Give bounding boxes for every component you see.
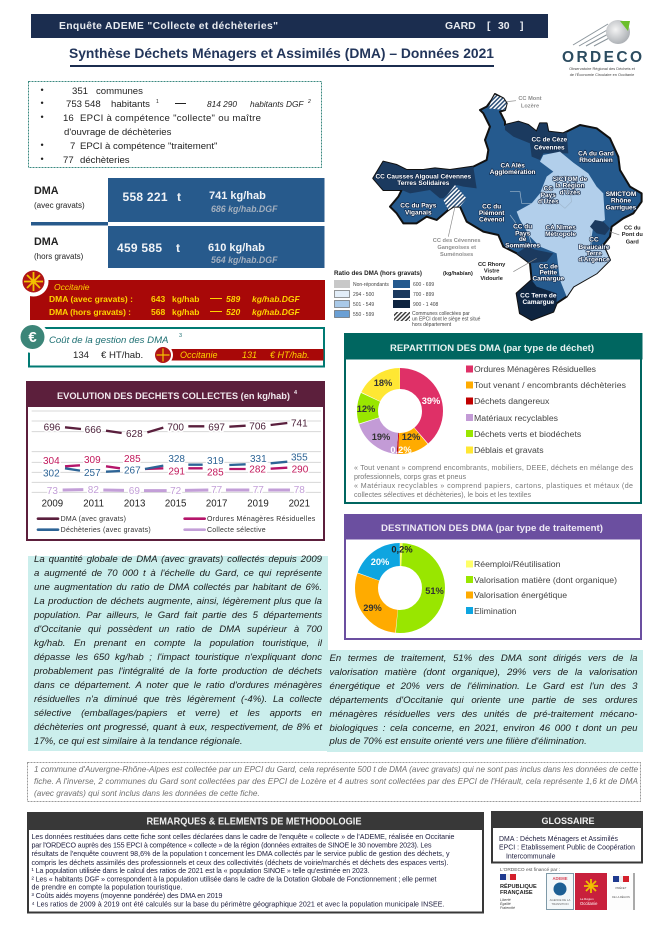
- panel: management cost: € HT/hab.: [101, 350, 143, 361]
- map of EPCI ratios: Vistre: [484, 269, 499, 275]
- key figures box: 77: [63, 155, 74, 166]
- donut chart: waste types: [357, 378, 441, 455]
- text block: treatment analysis: énergétique et 20% vers de l'élimination. Le Gard est l'un des 3: [330, 681, 638, 692]
- text block: collection analysis: d'Occitanie qui possèdent un ratio de DMA supérieur à 700: [34, 624, 322, 635]
- note: definitions: [354, 464, 633, 499]
- panel: Occitanie comparison: kg/hab.DGF: [252, 307, 301, 317]
- logo: République française: FRANÇAISE: [500, 890, 533, 896]
- map of EPCI ratios: CC du: [624, 225, 641, 231]
- map of EPCI ratios: Agglomération: [490, 169, 536, 176]
- panel: glossary: [491, 811, 643, 862]
- chart legend: Déchèteries (avec gravats): [61, 527, 151, 534]
- map of EPCI ratios: Beaucaire: [578, 244, 610, 251]
- map of EPCI ratios: Gangeoises et: [437, 245, 476, 251]
- note: cross-boundary communes: (avec gravats) qui sont inclus dans les données de cette fiche.: [34, 789, 260, 798]
- remarks text: de prendre en compte la population touristique.: [32, 884, 183, 892]
- donut chart: waste types: 12%: [402, 432, 421, 442]
- text block: treatment analysis: En termes de traitement, 51% des DMA sont dirigés vers de la: [330, 653, 638, 664]
- line chart: 77: [211, 485, 223, 496]
- remarks text: par l'ORDECO auprès des 155 EPCI à compétence « collecte » de la région (données extraites de SINOE le 30 novembre 2023). Les: [32, 842, 432, 850]
- note: definitions: collectes sélectives et déchèteries), le bois et les textiles: [354, 491, 531, 499]
- map of EPCI ratios: [373, 94, 643, 320]
- text block: treatment analysis: plus de 70% est ensuite orienté vers une filière d'élimination.: [330, 736, 587, 747]
- logo: Région Occitanie: La Région: [580, 897, 594, 901]
- text block: collection analysis: La quantité globale de DMA (avec gravats) collectés depuis 2009: [34, 554, 322, 565]
- DMA with rubble figures: 558 221: [122, 190, 168, 204]
- heading: evolution: 4: [294, 390, 298, 396]
- legend: waste types: Déblais et gravats: [474, 445, 544, 455]
- text block: treatment analysis: [327, 650, 643, 752]
- key figures box: •: [40, 98, 44, 108]
- panel: evolution of collected waste: [26, 381, 325, 540]
- chart legend: [37, 516, 316, 534]
- header bar: [: [487, 21, 491, 32]
- map of EPCI ratios: CC Rhony: [478, 262, 506, 268]
- logo: ORDECO: Observatoire Régional des Déchets et: [569, 66, 636, 71]
- panel: management cost: € HT/hab.: [270, 350, 310, 360]
- line chart: 355: [291, 452, 308, 463]
- map of EPCI ratios: Piémont: [479, 210, 505, 217]
- map of EPCI ratios: CA Alès: [500, 162, 525, 169]
- DMA without rubble figures: DMA: [34, 236, 59, 248]
- chart legend: DMA (avec gravats): [61, 516, 126, 523]
- map of EPCI ratios: la Région: [555, 183, 585, 190]
- text block: collection analysis: population. Par ailleurs, le Gard fait partie des 5 départements: [34, 610, 322, 621]
- glossary text: DMA : Déchets Ménagers et Assimilés: [499, 836, 619, 843]
- panel: management cost: €: [28, 329, 37, 346]
- text block: treatment analysis: valorisation matière (dont organique), 29% vers de la valorisation: [330, 667, 638, 678]
- line chart: 696: [44, 422, 61, 433]
- map of EPCI ratios: CC de: [539, 263, 558, 270]
- map of EPCI ratios: d'Uzès: [538, 198, 559, 205]
- map of EPCI ratios: Cévennes: [534, 144, 565, 151]
- remarks text: ¹ La population utilisée dans le calcul des ratios de 2021 est la « population SINOE » telle qu'estimée en 2023.: [32, 867, 370, 875]
- heading: destination: DESTINATION DES DMA (par type de traitement): [381, 523, 603, 533]
- key figures box: 2: [307, 99, 311, 105]
- logo: République française: Liberté: [500, 898, 511, 902]
- line chart: 290: [292, 464, 309, 475]
- key figures box: communes: [96, 86, 143, 97]
- text block: collection analysis: 17%, ce qui est similaire à la tendance régionale.: [34, 736, 243, 747]
- map of EPCI ratios: Sommières: [505, 242, 541, 249]
- panel: management cost: Occitanie: [180, 350, 218, 360]
- map of EPCI ratios: d'Uzès: [560, 189, 581, 196]
- legend: waste types: Déchets verts et biodéchets: [474, 429, 582, 439]
- map legend: 294 - 500: [353, 292, 374, 298]
- map of EPCI ratios: Viganais: [405, 209, 432, 216]
- logo: Préfet: PRÉFET: [615, 885, 627, 890]
- map of EPCI ratios: CC: [544, 186, 553, 193]
- map of EPCI ratios: CC Mont: [518, 96, 542, 102]
- map of EPCI ratios: CC Causses Aigoual Cévennes: [376, 173, 472, 180]
- text block: collection analysis: kg/hab. En prenant en compte la population touristique, il: [34, 638, 322, 649]
- line chart: 331: [250, 454, 267, 465]
- logo: ORDECO: ORDECO: [562, 49, 642, 66]
- map of EPCI ratios: Pont du: [622, 232, 643, 238]
- glossary text: [499, 836, 635, 860]
- heading: evolution: EVOLUTION DES DECHETS COLLECTES (en kg/hab): [57, 391, 290, 402]
- line chart: 328: [168, 454, 185, 465]
- funders logos: L'ORDECO est financé par :: [500, 867, 560, 873]
- legend: treatment: Valorisation matière (dont organique): [474, 575, 617, 585]
- text block: treatment analysis: ménagères résiduelles vers des unités de pré-traitement mécano-: [330, 709, 638, 720]
- key figures box: •: [40, 112, 44, 122]
- line chart: 2013: [124, 499, 145, 510]
- panel: Occitanie comparison: DMA (avec gravats) :: [49, 294, 133, 304]
- text block: collection analysis: résiduelles n'a diminué que très légèrement (-4%). La collecte: [34, 694, 322, 705]
- map of EPCI ratios: CA du Gard: [578, 150, 614, 157]
- remarks text: résultats de l'enquête couvrent 98,6% de la population t concernent les DMA collectés par le service public de gestion des déchets, y: [32, 850, 450, 858]
- map of EPCI ratios: Métropole: [545, 231, 577, 238]
- remarks text: Les données restituées dans cette fiche sont celles déclarées dans le cadre de l'enquête « collecte » de l'ADEME, réalisée en Occitanie: [32, 833, 455, 841]
- map legend: Non-répondants: [353, 282, 389, 288]
- note: cross-boundary communes: 1 commune d'Auvergne-Rhône-Alpes est collectée par un EPCI du Gard, cela représente 500 t de DMA (avec gravats) qui ne sont pas inclus dans les données de cette: [34, 765, 638, 774]
- DMA with rubble figures: 686 kg/hab.DGF: [211, 204, 278, 214]
- map legend: [334, 270, 481, 328]
- note: cross-boundary communes: fiche. A l'inverse, 2 communes du Gard sont collectées par des EPCI de Lozère et 4 autres sont collectées par des EPCI de l'Hérault, cela représente 1,6 kt de DMA: [34, 777, 639, 786]
- line chart: 2019: [247, 499, 269, 510]
- note: definitions: professionnels, corps gras et pneus: [354, 473, 466, 481]
- key figures box: •: [40, 154, 44, 164]
- text block: collection analysis: dans ce département. A noter que le ratio d'ordures ménagères: [34, 680, 322, 691]
- legend: treatment: [466, 559, 617, 616]
- map of EPCI ratios: CC: [589, 237, 599, 244]
- map of EPCI ratios: CC de Cèze: [531, 137, 568, 144]
- key figures box: 814 290: [207, 99, 237, 109]
- text block: collection analysis: une augmentation du ratio de DMA collectés par habitant de 6%.: [34, 582, 322, 593]
- donut chart: waste types: 0,2%: [390, 445, 412, 455]
- map of EPCI ratios: SICTOM de: [553, 176, 588, 183]
- map of EPCI ratios: Rhône: [611, 198, 631, 205]
- donut chart: treatment: 20%: [371, 557, 390, 567]
- remarks text: ² Les « habitants DGF » correspondent à la population utilisée dans le cadre de la Dotation Globale de Fonctionnement ; elle permet: [32, 876, 437, 884]
- line chart: 2017: [206, 499, 227, 510]
- DMA without rubble figures: [34, 226, 324, 268]
- line chart: 78: [294, 485, 305, 496]
- DMA with rubble figures: 741 kg/hab: [209, 190, 266, 202]
- key figures box: habitants DGF: [250, 99, 304, 109]
- note: definitions: « Matériaux recyclables » comprend papiers, cartons, plastiques et métaux (de: [354, 482, 633, 490]
- key figures box: 753 548: [66, 99, 101, 110]
- legend: treatment: Valorisation énergétique: [474, 590, 567, 600]
- text block: collection analysis: La production de déchets augmente, ainsi, légèrement plus que la: [34, 596, 322, 607]
- panel: management cost: 134: [73, 350, 90, 361]
- map legend: 550 - 599: [353, 312, 374, 318]
- line chart: 267: [124, 465, 141, 476]
- panel: Occitanie comparison: 568: [151, 307, 165, 317]
- line chart: 319: [207, 456, 224, 467]
- panel: destination by treatment: [344, 514, 642, 639]
- panel: Occitanie comparison: 589: [226, 294, 240, 304]
- line chart: 302: [43, 468, 60, 479]
- header bar: 30: [498, 21, 510, 32]
- legend: treatment: Elimination: [474, 606, 517, 616]
- logo: Préfet: [608, 873, 635, 910]
- panel: Occitanie comparison: kg/hab.DGF: [252, 294, 301, 304]
- DMA without rubble figures: 459 585: [117, 241, 162, 255]
- text block: collection analysis: déchèteries ont progressé, quant à eux, respectivement, de 8% et: [34, 722, 322, 733]
- line chart: 285: [207, 467, 224, 478]
- panel: management cost: [16, 321, 324, 366]
- map of EPCI ratios: Garrigues: [606, 204, 637, 211]
- panel: Occitanie comparison: kg/hab: [172, 307, 199, 317]
- legend: waste types: Tout venant / encombrants déchèteries: [474, 380, 627, 390]
- line chart: 2021: [289, 499, 310, 510]
- map of EPCI ratios: CC du: [482, 203, 501, 210]
- key figures box: déchèteries: [80, 155, 130, 166]
- map of EPCI ratios: CC Terre de: [520, 292, 557, 299]
- remarks text: ³ Coûts aidés moyens (moyenne pondérée) des DMA en 2019: [32, 892, 223, 900]
- header bar: [31, 14, 548, 38]
- line chart: 291: [168, 466, 185, 477]
- map legend: 700 - 899: [413, 292, 434, 298]
- donut chart: treatment: 29%: [363, 603, 383, 613]
- chart legend: Ordures Ménagères Résiduelles: [207, 516, 316, 523]
- map of EPCI ratios: Terres Solidaires: [397, 180, 450, 187]
- panel: Occitanie comparison: Occitanie: [54, 282, 90, 292]
- logo: ADEME: AGENCE DE LA: [550, 898, 570, 902]
- panel: breakdown by waste type: [344, 333, 642, 503]
- donut chart: treatment: 51%: [425, 586, 445, 596]
- map of EPCI ratios: Petite: [539, 269, 558, 276]
- legend: waste types: Ordures Ménagères Résiduelles: [474, 364, 597, 374]
- donut chart: waste types: 19%: [372, 432, 391, 442]
- map of EPCI ratios: d'Argence: [578, 257, 610, 264]
- line chart: 697: [208, 422, 225, 433]
- text block: treatment analysis: biologiques : cela concerne, en 2021, environ 46 000 t dont un peu: [330, 723, 638, 734]
- legend: waste types: Déchets dangereux: [474, 396, 550, 406]
- map of EPCI ratios: Camargue: [522, 299, 555, 306]
- DMA with rubble figures: [31, 178, 324, 226]
- map of EPCI ratios: Rhodanien: [579, 157, 613, 164]
- DMA without rubble figures: t: [176, 241, 180, 255]
- remarks text: [32, 833, 455, 908]
- map of EPCI ratios: Cévenol: [479, 217, 504, 224]
- map of EPCI ratios: Lozère: [521, 104, 539, 110]
- map of EPCI ratios: de: [519, 236, 527, 243]
- heading: breakdown: REPARTITION DES DMA (par type de déchet): [390, 343, 594, 354]
- logo: ADEME: [546, 874, 574, 910]
- map legend: Communes collectées par: [412, 311, 470, 317]
- legend: waste types: [466, 364, 627, 455]
- line chart: [32, 411, 321, 510]
- key figures box: 1: [156, 99, 159, 105]
- line chart: 304: [43, 456, 60, 467]
- map legend: hors département: [412, 322, 452, 328]
- logo: République française: Fraternité: [500, 906, 515, 910]
- map of EPCI ratios: Terre: [586, 251, 602, 258]
- map of EPCI ratios: SMICTOM: [606, 191, 636, 198]
- logo: Région Occitanie: Occitanie: [580, 901, 598, 906]
- logo: ADEME: ADEME: [552, 876, 568, 881]
- glossary text: EPCI : Etablissement Public de Coopération: [499, 844, 635, 852]
- line chart: 741: [291, 418, 308, 429]
- DMA without rubble figures: (hors gravats): [34, 252, 84, 261]
- panel: management cost: 131: [242, 350, 257, 360]
- text block: collection analysis: sélective (emballages/papiers et verre) et les apports en: [34, 708, 322, 719]
- map legend: Ratio des DMA (hors gravats): [334, 270, 422, 277]
- line chart: 666: [85, 425, 102, 436]
- text block: collection analysis: a augmenté de 70 000 t à l'échelle du Gard, ce qui représente: [34, 568, 322, 579]
- note: definitions: « Tout venant » comprend encombrants, mobiliers, DEEE, déchets en mélange des: [354, 464, 633, 472]
- line chart: 2011: [83, 499, 104, 510]
- text block: treatment analysis: départements d'Occitanie qui oriente une partie de ses ordures: [330, 695, 638, 706]
- map of EPCI ratios: CC du Pays: [400, 203, 437, 210]
- map of EPCI ratios: Suménoises: [440, 252, 473, 258]
- line chart: 73: [47, 486, 58, 497]
- line chart: 700: [167, 422, 184, 433]
- line chart: 282: [249, 465, 266, 476]
- DMA with rubble figures: t: [177, 190, 181, 204]
- key figures box: 7: [70, 141, 75, 152]
- panel: management cost: 3: [179, 333, 182, 339]
- heading: remarks: REMARQUES & ELEMENTS DE METHODOLOGIE: [146, 816, 362, 828]
- donut chart: treatment: 0,2%: [391, 544, 413, 554]
- map of EPCI ratios: CC du: [513, 224, 532, 231]
- logo: Région Occitanie: [575, 873, 607, 910]
- header bar: ]: [520, 21, 523, 32]
- map legend: 501 - 549: [353, 302, 374, 308]
- key figures box: EPCI à compétence "collecte" ou maître: [80, 113, 261, 124]
- legend: treatment: Réemploi/Réutilisation: [474, 559, 561, 569]
- donut chart: treatment: [363, 544, 445, 622]
- logo: ORDECO: de l'Économie Circulaire en Occitanie: [570, 72, 634, 77]
- glossary text: Intercommunale: [506, 854, 556, 860]
- key figures box: habitants: [111, 99, 150, 110]
- key figures box: d'ouvrage de déchèteries: [64, 127, 172, 138]
- line chart: 2009: [42, 499, 63, 510]
- line chart: 285: [124, 454, 141, 465]
- DMA without rubble figures: 610 kg/hab: [208, 242, 265, 254]
- heading: glossary: GLOSSAIRE: [541, 816, 595, 826]
- panel: Occitanie comparison: 520: [226, 307, 240, 317]
- logo: Préfet: DE LA RÉGION: [612, 896, 630, 899]
- text block: collection analysis: [28, 554, 328, 751]
- donut chart: waste types: 39%: [422, 396, 441, 406]
- panel: Occitanie comparison: kg/hab: [172, 294, 199, 304]
- line chart: 309: [84, 455, 101, 466]
- text block: collection analysis: dépasse les 650 kg/hab ; l'impact touristique n'expliquant donc: [34, 652, 322, 663]
- map legend: un EPCI dont le siège est situé: [412, 316, 481, 322]
- text block: collection analysis: probablement pas l'intégralité de la forte production de déchets: [34, 666, 322, 677]
- logo: République française: RÉPUBLIQUE: [500, 882, 537, 890]
- key figures box: 16: [63, 113, 74, 124]
- title: Synthèse Déchets Ménagers et Assimilés (DMA) – Données 2021: [69, 45, 494, 61]
- DMA with rubble figures: DMA: [34, 185, 59, 197]
- map of EPCI ratios: Vidourle: [480, 276, 503, 282]
- line chart: 706: [249, 421, 266, 432]
- DMA without rubble figures: 564 kg/hab.DGF: [211, 255, 278, 265]
- map of EPCI ratios: CC des Cévennes: [433, 238, 481, 244]
- logo: République française: Égalité: [500, 901, 511, 906]
- panel: management cost: Coût de la gestion des DMA: [49, 335, 168, 346]
- DMA with rubble figures: (avec gravats): [34, 201, 85, 210]
- key figures box: 351: [72, 86, 88, 97]
- donut chart: waste types: 18%: [374, 378, 393, 388]
- map legend: 600 - 699: [413, 282, 434, 288]
- panel: Occitanie comparison: [18, 266, 325, 320]
- logo: ORDECO: [562, 20, 642, 77]
- header bar: Enquête ADEME "Collecte et déchèteries": [59, 21, 278, 32]
- logo: République française: [500, 874, 537, 910]
- line chart: 72: [170, 486, 182, 497]
- logo: ADEME: TRANSITION: [552, 902, 568, 906]
- note: cross-boundary communes: [28, 762, 640, 802]
- header bar: GARD: [445, 21, 476, 32]
- map legend: (kg/hab/an): [443, 271, 473, 277]
- panel: Occitanie comparison: 643: [151, 294, 165, 304]
- panel: Occitanie comparison: DMA (hors gravats) :: [49, 307, 131, 317]
- line chart: 2015: [165, 499, 186, 510]
- chart legend: Collecte sélective: [207, 527, 266, 534]
- legend: waste types: Matériaux recyclables: [474, 413, 559, 423]
- line chart: 628: [126, 429, 143, 440]
- line chart: 69: [129, 486, 140, 497]
- map of EPCI ratios: Camargue: [532, 276, 565, 283]
- map of EPCI ratios: Gard: [626, 239, 639, 245]
- map legend: 900 - 1 408: [413, 302, 439, 308]
- funders logos: [500, 867, 635, 910]
- remarks text: compris les déchets assimilés des professionnels et ceux des collectivités (déchets de voirie/marchés et déchets des espaces verts).: [32, 859, 449, 867]
- panel: remarks and methodology: [27, 812, 484, 912]
- key figures box: •: [40, 140, 44, 150]
- map of EPCI ratios: Pays: [541, 192, 556, 199]
- map of EPCI ratios: Pays: [515, 230, 531, 237]
- line chart: 77: [253, 485, 264, 496]
- line chart: 82: [88, 485, 99, 496]
- key figures box: [28, 82, 322, 168]
- key figures box: •: [40, 85, 44, 95]
- donut chart: waste types: 12%: [357, 404, 376, 414]
- line chart: 257: [84, 468, 101, 479]
- remarks text: ⁴ Les ratios de 2009 à 2019 ont été calculés sur la base du périmètre géographique 2021 et avec la population municipale INSEE.: [32, 900, 445, 908]
- key figures box: EPCI à compétence "traitement": [80, 141, 217, 152]
- map of EPCI ratios: CA Nîmes: [545, 224, 576, 231]
